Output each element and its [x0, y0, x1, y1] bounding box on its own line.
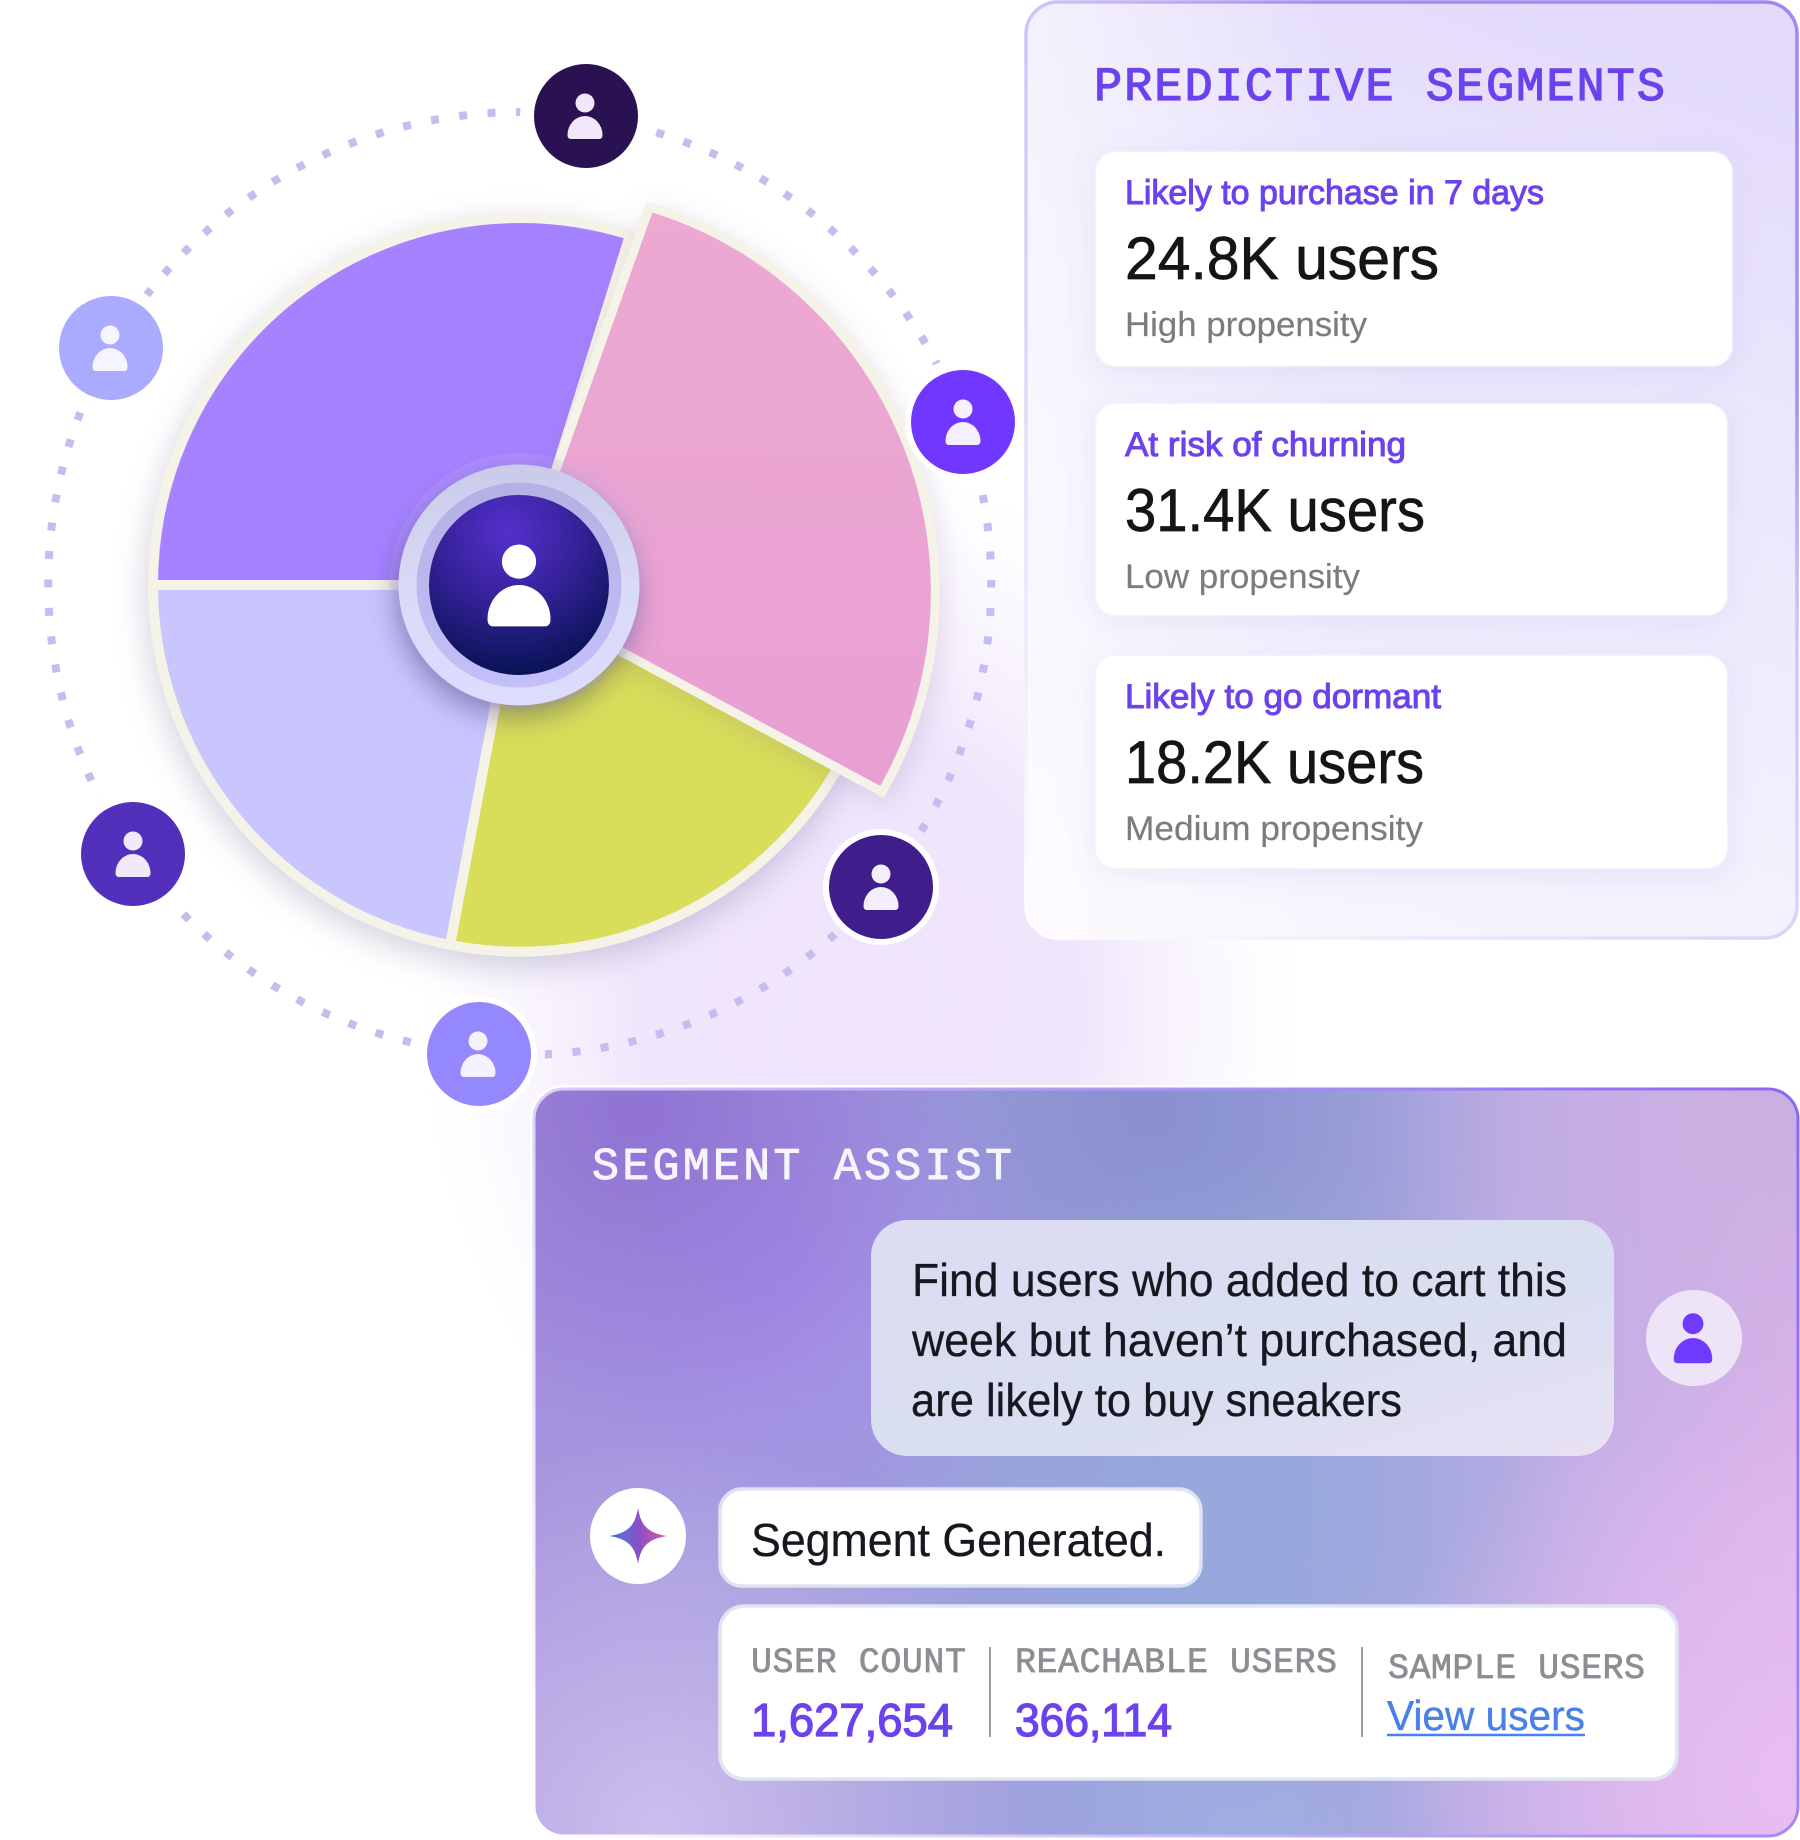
icon: user avatar [1646, 1290, 1742, 1386]
slice: lime [450, 585, 845, 952]
user node: lower right [823, 829, 939, 945]
panel: segment assist [530, 1085, 1800, 1840]
wheel slices [153, 218, 845, 952]
user message bubble: are likely to buy sneakers [911, 1374, 1402, 1426]
card: likely to go dormant [1096, 656, 1727, 868]
stat: reachable users [1015, 1643, 1337, 1746]
heading: predictive segments: PREDICTIVE SEGMENTS [1094, 62, 1665, 115]
dotted orbit ring [48, 112, 991, 1055]
background glow [300, 400, 1400, 1600]
slice: lavender [153, 585, 518, 945]
card: at risk of churning: 31.4K users [1125, 477, 1425, 544]
card: likely to go dormant: 18.2K users [1125, 729, 1424, 796]
card: at risk of churning: Low propensity [1125, 558, 1360, 596]
slice: pink raised [512, 207, 935, 792]
segment wheel [153, 207, 935, 952]
stat: user count [751, 1643, 966, 1746]
response bubble: segment generated [720, 1489, 1201, 1586]
centre hub [390, 453, 648, 711]
user message bubble: Find users who added to cart this [912, 1254, 1567, 1306]
card: likely to go dormant: Likely to go dormant [1125, 678, 1442, 716]
panel: predictive segments [1026, 2, 1797, 938]
response bubble: segment generated: Segment Generated. [751, 1514, 1166, 1566]
user node: bottom [421, 996, 537, 1112]
user message bubble: week but haven’t purchased, and [911, 1314, 1567, 1366]
card: likely to purchase [1096, 152, 1732, 366]
stat: user count: USER COUNT [751, 1643, 966, 1683]
card: at risk of churning [1096, 404, 1727, 615]
heading: segment assist: SEGMENT ASSIST [592, 1142, 1012, 1193]
stat: sample users: SAMPLE USERS [1388, 1649, 1645, 1689]
card: likely to go dormant: Medium propensity [1125, 810, 1423, 848]
stat: reachable users: REACHABLE USERS [1015, 1643, 1337, 1683]
card: likely to purchase: 24.8K users [1125, 225, 1439, 292]
user node: top [534, 64, 638, 168]
stat: sample users: View users [1387, 1692, 1585, 1739]
card: likely to purchase: Likely to purchase in 7 days [1125, 174, 1544, 212]
card: at risk of churning: At risk of churning [1125, 426, 1406, 464]
icon: sparkle avatar [590, 1488, 686, 1584]
user message bubble [871, 1220, 1614, 1456]
user node: lower left [81, 802, 185, 906]
user node: right [905, 364, 1021, 480]
stat: sample users [1387, 1649, 1645, 1739]
card: likely to purchase: High propensity [1125, 306, 1367, 344]
stat: reachable users: 366,114 [1015, 1694, 1172, 1746]
slice: purple [153, 218, 630, 585]
stat: user count: 1,627,654 [751, 1694, 953, 1746]
results card [720, 1606, 1677, 1779]
user node: upper left [59, 296, 163, 400]
